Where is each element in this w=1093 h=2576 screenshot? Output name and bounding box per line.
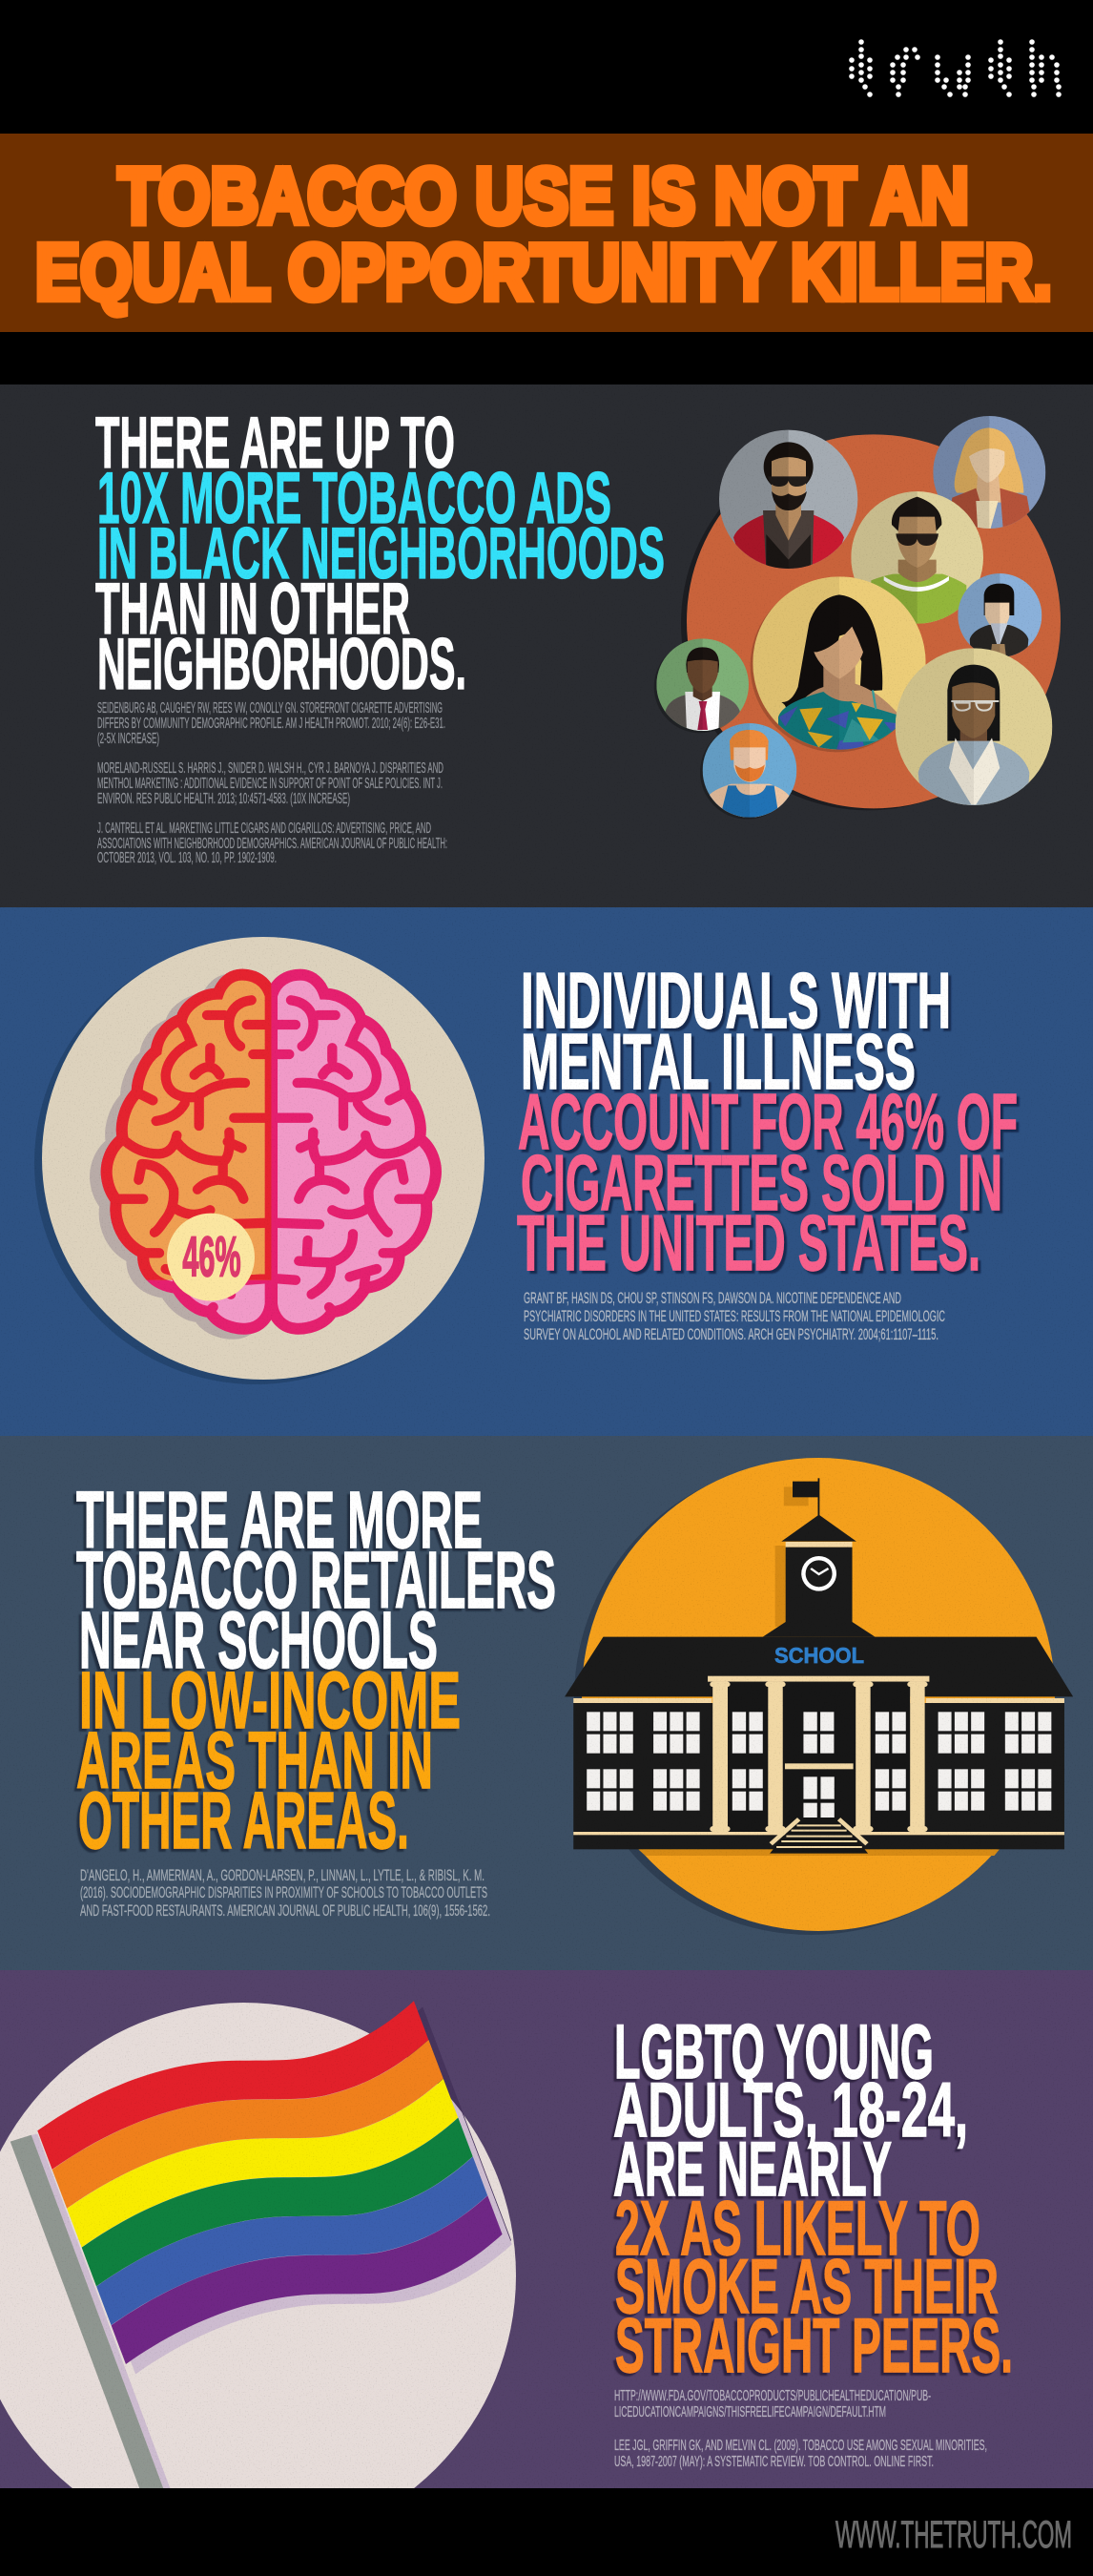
portrait: woman with glasses: [896, 648, 1052, 808]
heading: schools: TOBACCO RETAILERS: [76, 1535, 556, 1625]
school sign: SCHOOL: [774, 1643, 864, 1668]
flag pole: [10, 2134, 171, 2489]
heading: ads: IN BLACK NEIGHBORHOODS: [97, 513, 665, 594]
illustration: rainbow flag on disc: [0, 2001, 516, 2488]
heading: ads: [95, 403, 665, 705]
title banner: [0, 134, 1093, 332]
orange disc: [574, 1458, 1055, 1935]
portrait: man in green shirt: [851, 491, 983, 625]
references: ads: [97, 700, 447, 866]
references: LGBTQ: [614, 2388, 987, 2470]
portrait: man with sunglasses and red jacket: [718, 429, 858, 570]
illustration: brain on disc: [34, 937, 485, 1384]
portrait: blonde woman: [933, 416, 1045, 531]
heading: schools: NEAR SCHOOLS: [79, 1595, 438, 1685]
disc: [34, 937, 485, 1384]
heading: ads: 10X MORE TOBACCO ADS: [97, 458, 611, 539]
references: schools: (2016). SOCIODEMOGRAPHIC DISPARITIES IN PROXIMITY OF SCHOOLS TO TOBACCO OUTLETS: [80, 1883, 487, 1901]
portrait: man with tie: [654, 638, 749, 733]
references: ads: MORELAND-RUSSELL S. HARRIS J., SNIDER D. WALSH H., CYR J. BARNOYA J. DISPARITIES AND: [97, 760, 443, 777]
references: ads: DIFFERS BY COMMUNITY DEMOGRAPHIC PROFILE. AM J HEALTH PROMOT. 2010; 24(6): E26-E31.: [97, 716, 445, 732]
references: schools: [80, 1866, 490, 1920]
heading: schools: IN LOW-INCOME: [79, 1655, 461, 1745]
flag stripes: [37, 2001, 503, 2364]
steps: [770, 1818, 868, 1854]
disc: [0, 2003, 516, 2488]
panel: mental illness: [0, 907, 1093, 1436]
references: ads: J. CANTRELL ET AL. MARKETING LITTLE CIGARS AND CIGARILLOS: ADVERTISING, PRICE, AND: [97, 821, 431, 837]
logo: truth: [852, 42, 1059, 94]
building: [565, 1478, 1073, 1856]
references: schools: D'ANGELO, H., AMMERMAN, A., GORDON-LARSEN, P., LINNAN, L., LYTLE, L., & RIBISL, K. M.: [80, 1866, 485, 1884]
46% badge: [167, 1214, 255, 1301]
clock: [801, 1556, 836, 1591]
panel: low-income schools: [0, 1436, 1093, 1970]
columns: [710, 1682, 928, 1832]
title text: [35, 151, 1052, 317]
portrait: red-haired man in tank top: [700, 723, 796, 820]
heading: schools: [76, 1475, 556, 1865]
references: ads: OCTOBER 2013, VOL. 103, NO. 10, PP. 1902-1909.: [97, 850, 277, 866]
windows: [587, 1712, 1051, 1811]
heading: schools: THERE ARE MORE: [76, 1475, 483, 1565]
illustration: group of people: [654, 416, 1061, 820]
heading: schools: AREAS THAN IN: [76, 1715, 433, 1805]
references: ads: (2-5X INCREASE): [97, 731, 159, 747]
heading: mental illness: [517, 956, 1018, 1287]
heading: ads: THAN IN OTHER: [95, 569, 410, 650]
panel: tobacco ads in Black neighborhoods: SEIDENBURG AB, CAUGHEY RW, REES VW, CONOLLY GN. STOREFRONT CIGARETTE ADVERTISING: [97, 700, 443, 717]
references: schools: AND FAST-FOOD RESTAURANTS. AMERICAN JOURNAL OF PUBLIC HEALTH, 106(9), 1556-1562.: [80, 1901, 490, 1920]
references: mental illness: [524, 1290, 945, 1343]
heading: ads: NEIGHBORHOODS.: [97, 624, 466, 705]
heading: ads: THERE ARE UP TO: [95, 403, 455, 484]
portrait: woman in patterned top: [751, 576, 926, 752]
panel: LGBTQ young adults: [0, 1970, 1093, 2488]
46% badge: 46%: [182, 1225, 241, 1289]
flag: [793, 1478, 819, 1516]
references: ads: MENTHOL MARKETING : ADDITIONAL EVIDENCE IN SUPPORT OF POINT OF SALE POLICIES. INT J.: [97, 776, 443, 792]
illustration: school: [565, 1458, 1073, 1935]
orange backdrop circle: [681, 434, 1061, 810]
portrait: woman with black bob: [958, 573, 1041, 658]
heading: schools: OTHER AREAS.: [78, 1776, 409, 1865]
heading: LGBTQ: [613, 2009, 1013, 2389]
panel: tobacco ads in Black neighborhoods: ASSOCIATIONS WITH NEIGHBORHOOD DEMOGRAPHICS. AMERICAN JOURNAL OF PUBLIC HEALTH:: [97, 836, 447, 852]
brain: [95, 975, 436, 1334]
panel: tobacco ads in Black neighborhoods: [0, 384, 1093, 907]
door: [803, 1776, 835, 1818]
references: ads: ENVIRON. RES PUBLIC HEALTH. 2013; 10:4571-4583. (10X INCREASE): [97, 791, 350, 807]
title text: TOBACCO USE IS NOT AN: [118, 151, 969, 240]
